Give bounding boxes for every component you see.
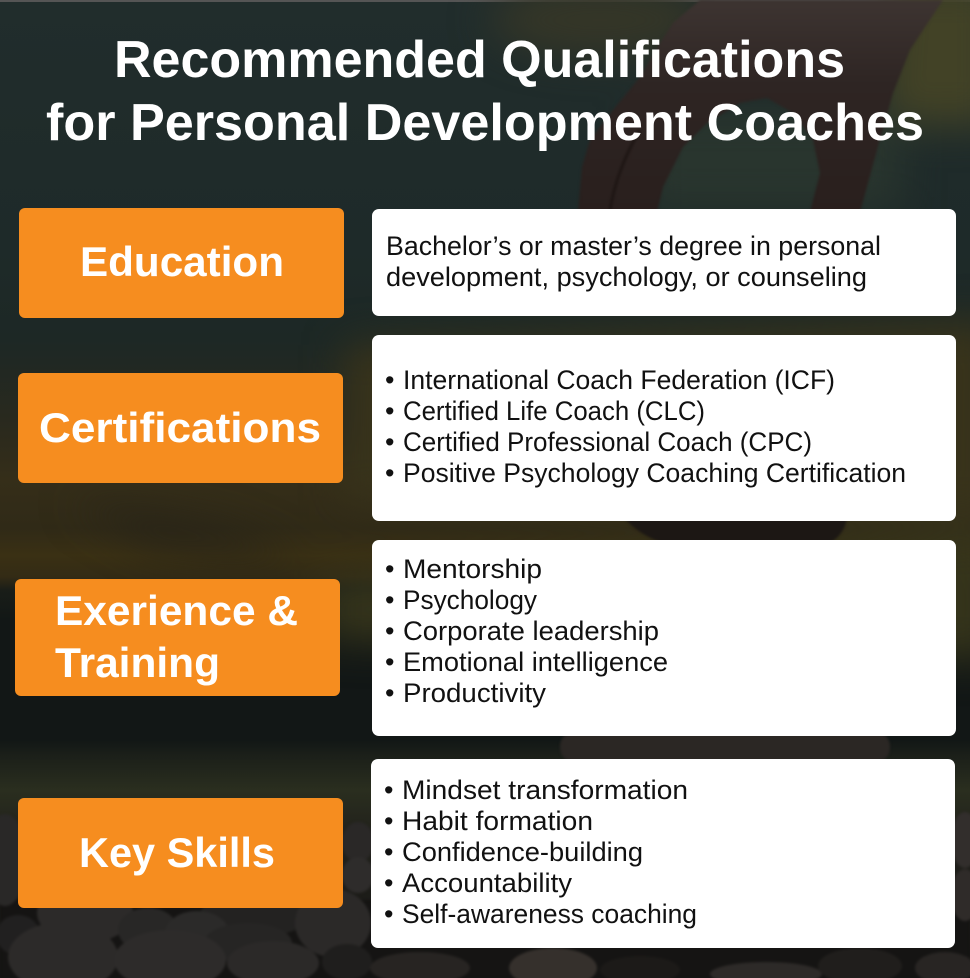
title: for Personal Development Coaches: [46, 94, 924, 152]
panel: experience list: [372, 540, 956, 736]
panel: certifications list: •: [385, 427, 394, 457]
panel: experience list: •: [385, 678, 394, 708]
panel: key skills list: Habit formation: [402, 806, 593, 836]
pebbles: [0, 812, 970, 978]
panel: key skills list: [371, 759, 955, 948]
panel: certifications list: Certified Professional Coach (CPC): [403, 427, 812, 457]
panel: key skills list: Mindset transformation: [402, 775, 688, 805]
label: key skills: Key Skills: [79, 829, 275, 876]
panel: key skills list: •: [384, 868, 393, 898]
panel: certifications list: [372, 335, 956, 521]
panel: experience list: •: [385, 554, 394, 584]
row: education: [19, 208, 956, 318]
panel: experience list: Productivity: [403, 678, 546, 708]
panel: education details: Bachelor’s or master’s degree in personal: [386, 231, 881, 261]
panel: experience list: Emotional intelligence: [403, 647, 668, 677]
panel: certifications list: •: [385, 396, 394, 426]
row: experience and training: [15, 540, 956, 736]
title: Recommended Qualifications: [114, 31, 845, 89]
panel: education details: [372, 209, 956, 316]
panel: key skills list: •: [384, 899, 393, 929]
label: key skills: [18, 798, 343, 908]
stones stacked: [560, 518, 890, 762]
panel: experience list: •: [385, 647, 394, 677]
row: certifications: [18, 335, 956, 521]
panel: certifications list: Positive Psychology Coaching Certification: [403, 458, 906, 488]
panel: education details: development, psychology, or counseling: [386, 262, 867, 292]
panel: key skills list: •: [384, 837, 393, 867]
panel: certifications list: Certified Life Coach (CLC): [403, 396, 705, 426]
label: education: [19, 208, 344, 318]
panel: experience list: •: [385, 585, 394, 615]
panel: experience list: Corporate leadership: [403, 616, 659, 646]
panel: experience list: Mentorship: [403, 554, 542, 584]
label: certifications: [18, 373, 343, 483]
panel: experience list: •: [385, 616, 394, 646]
title: [46, 31, 924, 152]
panel: key skills list: Confidence-building: [402, 837, 643, 867]
label: experience and training: Exerience &: [55, 587, 298, 634]
panel: key skills list: Accountability: [402, 868, 573, 898]
label: experience and training: Training: [55, 639, 220, 686]
hand: [578, 0, 943, 212]
panel: certifications list: •: [385, 458, 394, 488]
row: key skills: [18, 759, 955, 948]
panel: certifications list: International Coach Federation (ICF): [403, 365, 835, 395]
label: experience and training: [15, 579, 340, 696]
panel: certifications list: •: [385, 365, 394, 395]
panel: key skills list: •: [384, 806, 393, 836]
panel: key skills list: Self-awareness coaching: [402, 899, 697, 929]
label: education: Education: [80, 238, 284, 285]
panel: experience list: Psychology: [403, 585, 537, 615]
label: certifications: Certifications: [39, 404, 321, 451]
panel: key skills list: •: [384, 775, 393, 805]
